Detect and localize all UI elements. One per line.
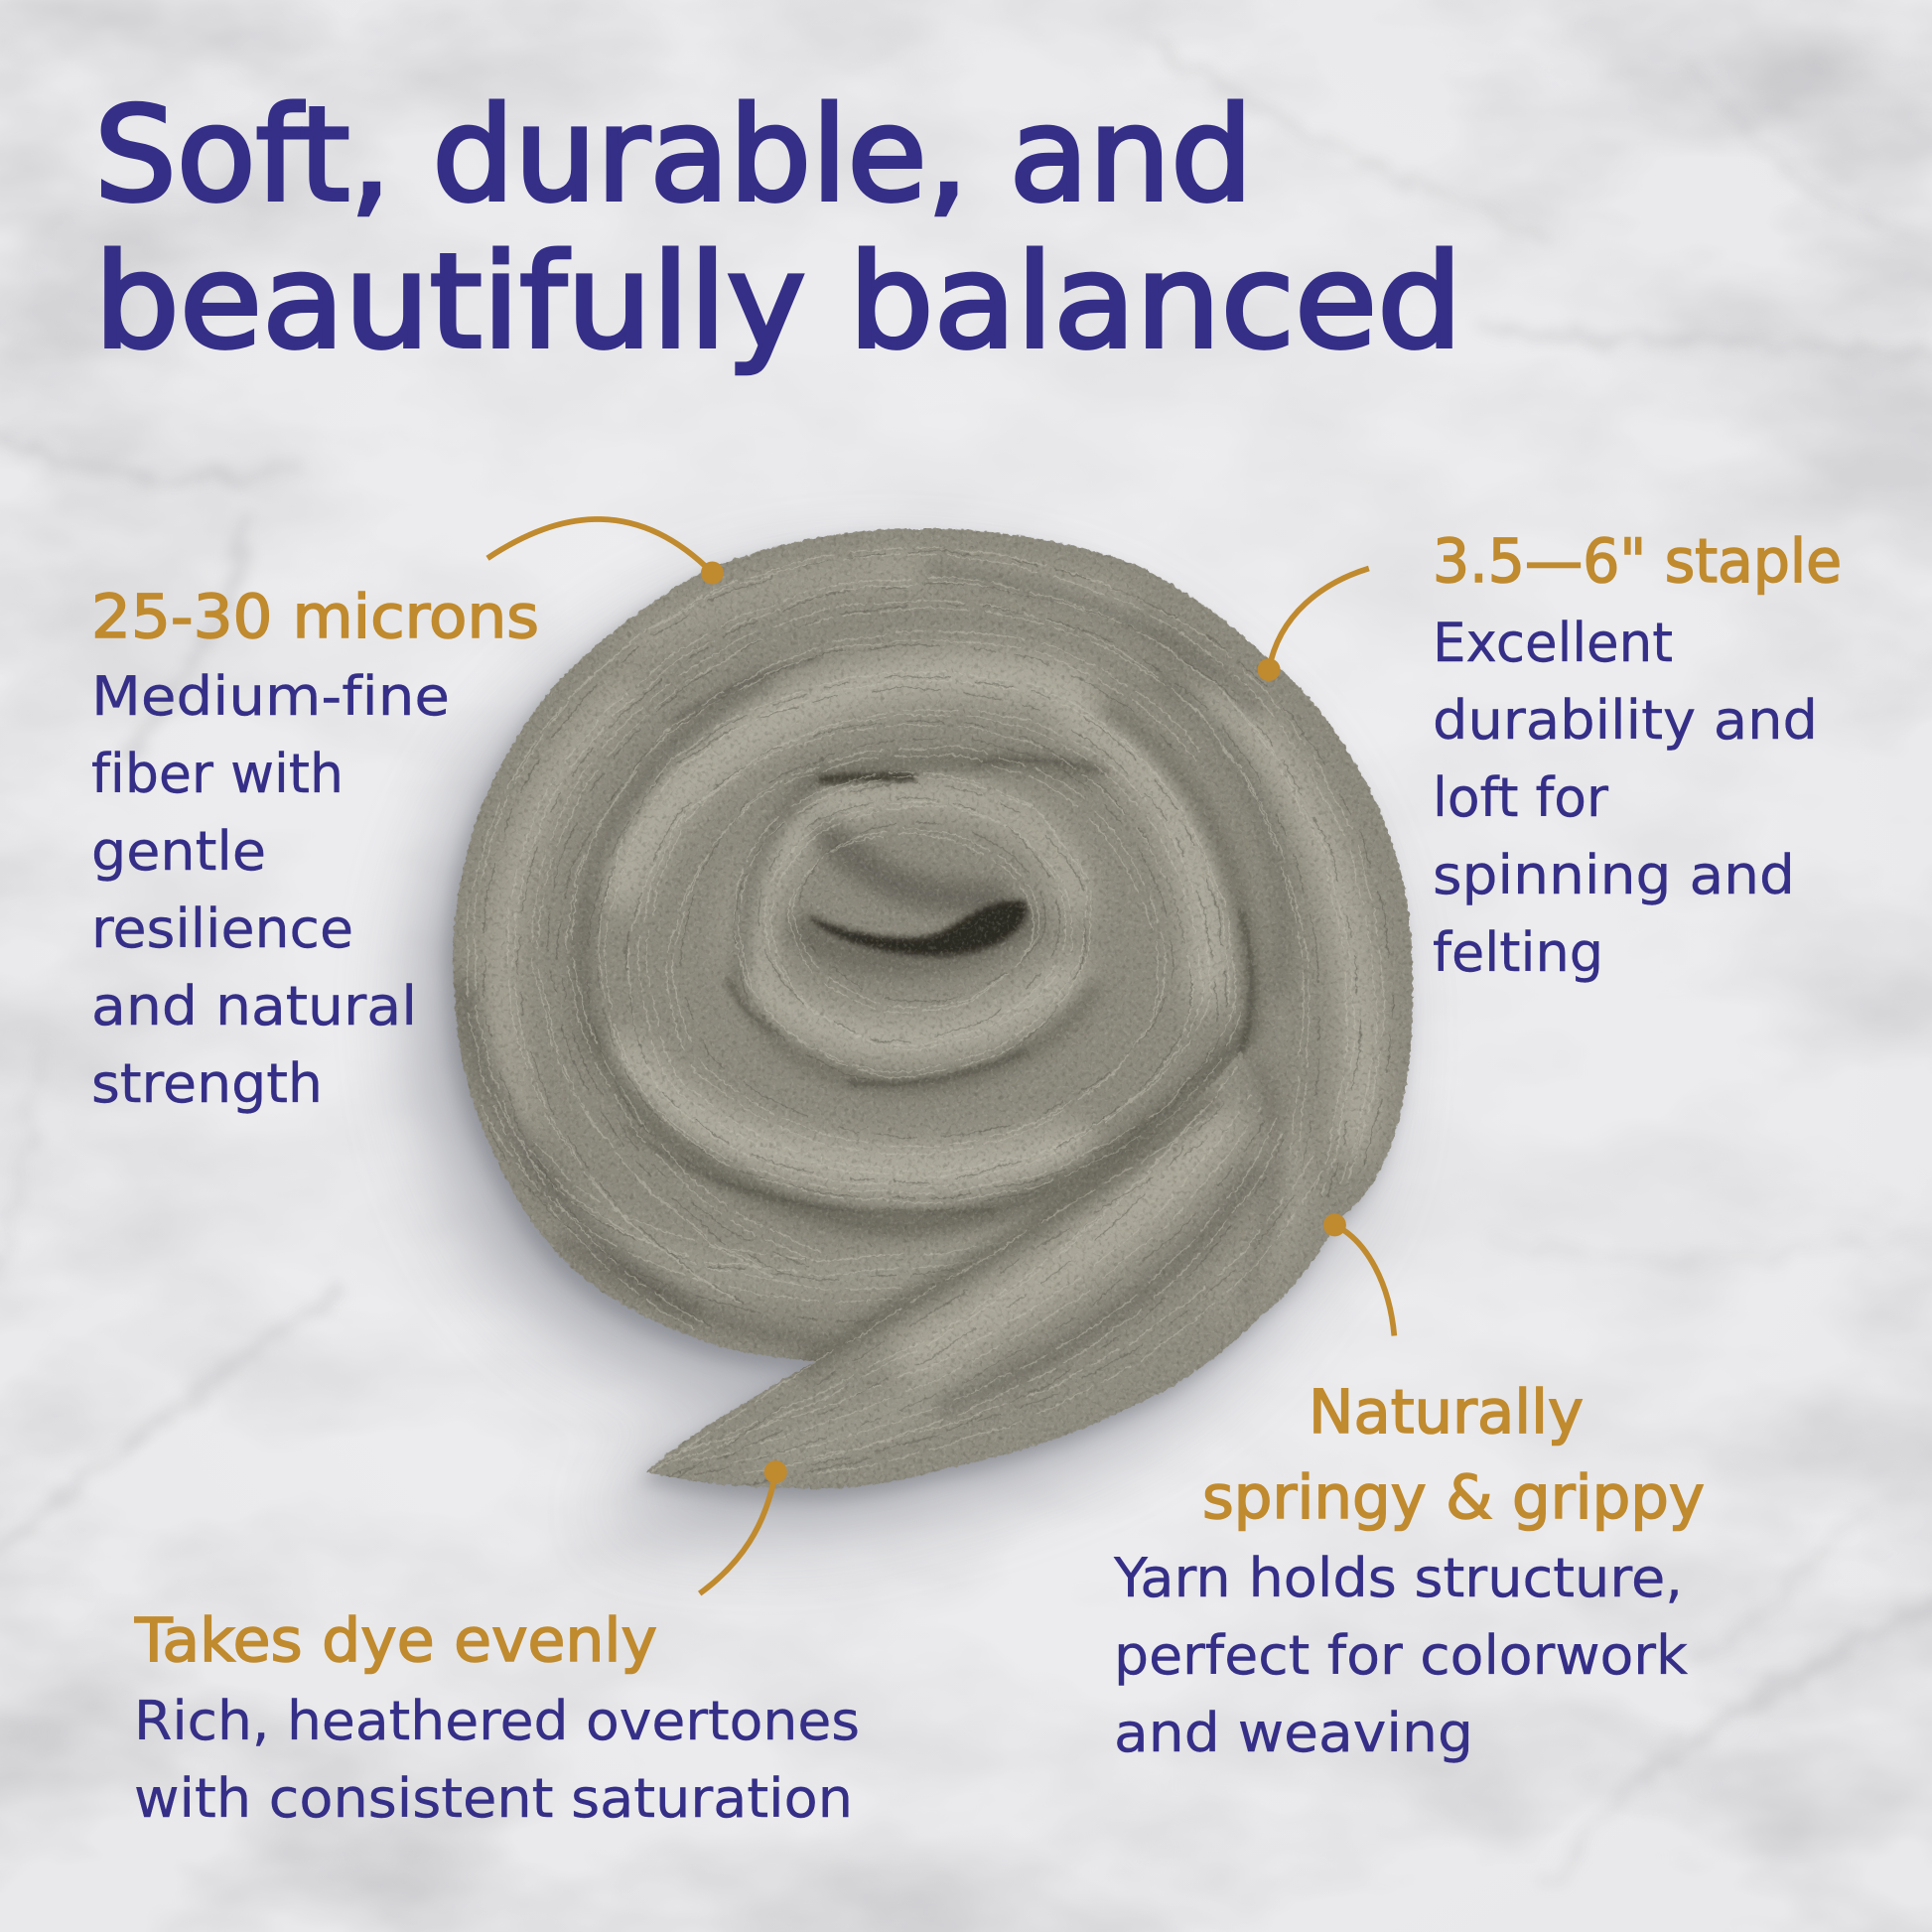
callout body: Medium-fine bbox=[91, 665, 450, 728]
callout: staple length bbox=[1433, 526, 1842, 984]
callout heading bbox=[1202, 1377, 1705, 1533]
callout body: Rich, heathered overtones bbox=[134, 1690, 860, 1752]
callout body bbox=[1113, 1547, 1689, 1764]
title: beautifully balanced bbox=[94, 225, 1462, 377]
callout body: Yarn holds structure, bbox=[1113, 1547, 1683, 1609]
strand creases bbox=[626, 658, 1252, 1213]
callout body: loft for bbox=[1433, 766, 1609, 829]
callout body: fiber with bbox=[91, 743, 344, 805]
connector arrows bbox=[487, 519, 1394, 1593]
connector: springy bbox=[1323, 1213, 1394, 1336]
callout body: gentle bbox=[91, 820, 266, 883]
callout body: and natural bbox=[91, 975, 417, 1037]
callout body: resilience bbox=[91, 897, 353, 960]
roving fibres: dark bbox=[483, 552, 1392, 1327]
strand highlights bbox=[500, 557, 1361, 1278]
connector: staple bbox=[1258, 569, 1369, 681]
callout: takes dye evenly bbox=[134, 1605, 860, 1830]
callout: springy and grippy bbox=[1113, 1377, 1705, 1764]
callout: 25-30 microns bbox=[91, 582, 539, 1115]
strand shadows bbox=[463, 570, 1284, 1342]
callout heading: 25-30 microns bbox=[91, 582, 539, 652]
centre hollow bbox=[810, 901, 1026, 955]
callout heading: Naturally bbox=[1309, 1377, 1584, 1448]
fibre grain bbox=[437, 506, 1449, 1519]
title: Soft, durable, and bbox=[94, 78, 1253, 230]
callout body bbox=[134, 1690, 860, 1830]
callout body: and weaving bbox=[1114, 1702, 1473, 1764]
callout heading: Takes dye evenly bbox=[134, 1605, 657, 1676]
callout heading: springy & grippy bbox=[1202, 1462, 1705, 1533]
roving fibres: light bbox=[467, 549, 1383, 1329]
coil base bbox=[453, 528, 1413, 1488]
callout body: Excellent bbox=[1433, 612, 1673, 674]
callout body: with consistent saturation bbox=[134, 1767, 853, 1830]
callout body: strength bbox=[91, 1052, 323, 1115]
callout body: perfect for colorwork bbox=[1114, 1624, 1689, 1687]
wool roving coil bbox=[437, 506, 1449, 1519]
callout body: durability and bbox=[1433, 689, 1818, 752]
loose tail strand bbox=[645, 1051, 1336, 1488]
callout body bbox=[1433, 612, 1818, 984]
connector: microns bbox=[487, 519, 724, 584]
callout body: felting bbox=[1433, 921, 1603, 984]
callout heading: 3.5—6" staple bbox=[1433, 526, 1842, 597]
callout body bbox=[91, 665, 450, 1115]
wool shadow bbox=[415, 539, 1405, 1533]
title bbox=[94, 78, 1462, 377]
connector: dye bbox=[700, 1460, 787, 1593]
callout body: spinning and bbox=[1433, 844, 1795, 906]
